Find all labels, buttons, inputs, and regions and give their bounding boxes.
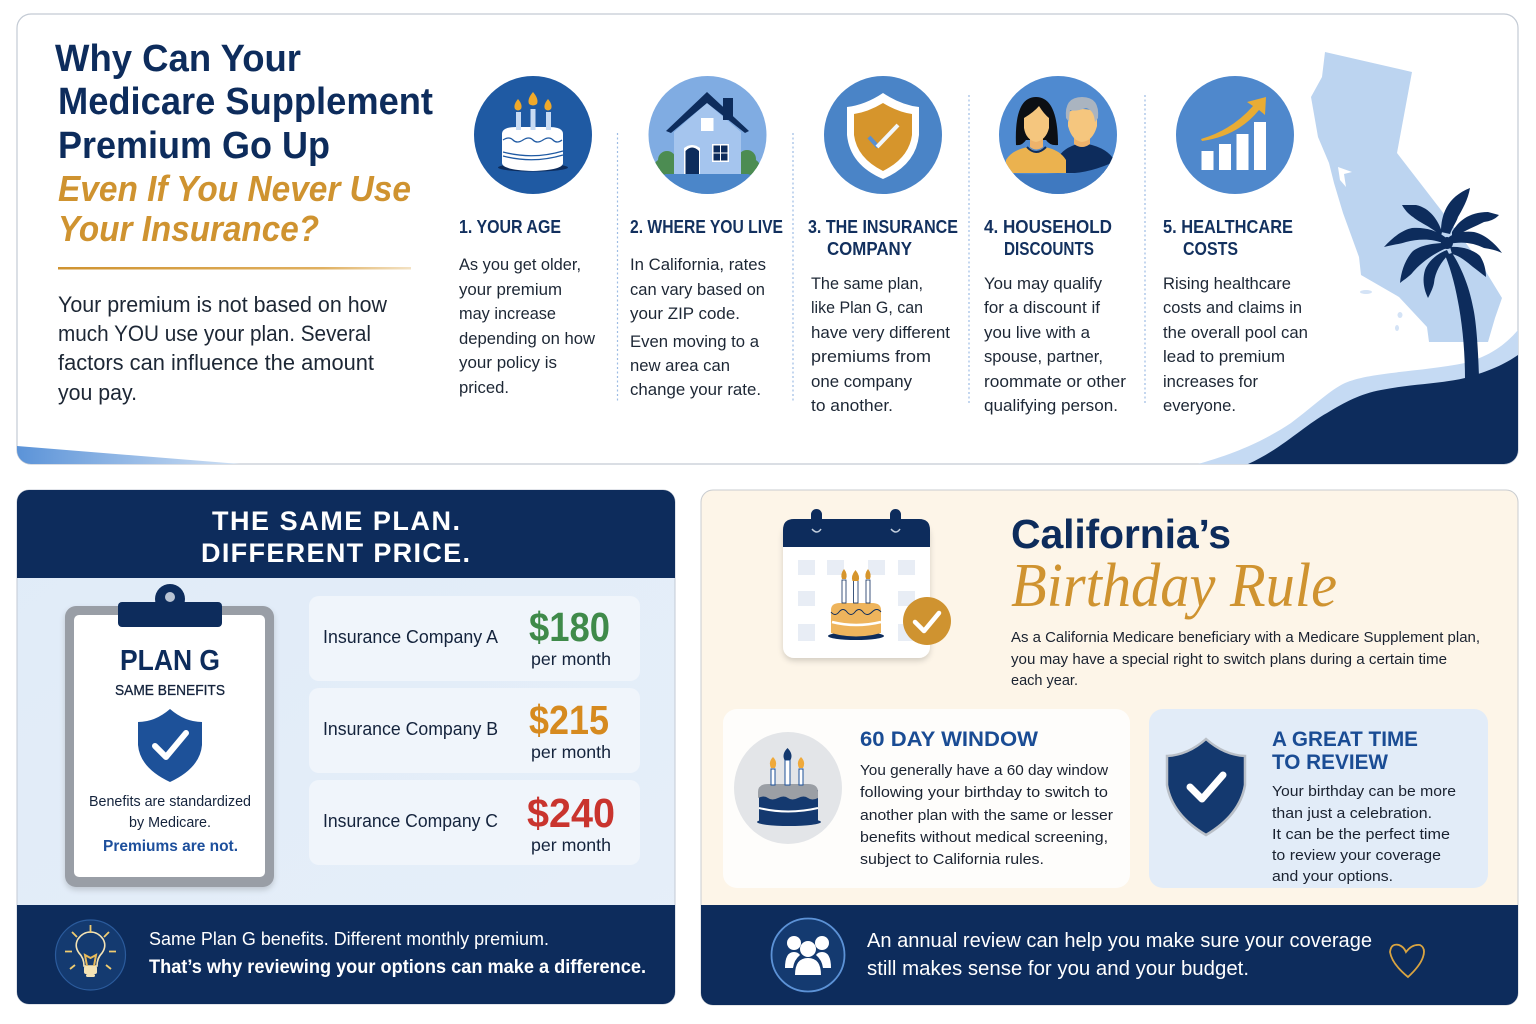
icon: house — [648, 76, 768, 199]
heading: same plan — [201, 506, 470, 568]
icon: birthday cake — [474, 76, 592, 194]
text: the insurance company: have very different — [811, 324, 950, 342]
text: healthcare costs: the overall pool can — [1163, 324, 1308, 342]
clipboard: plan G — [65, 584, 274, 887]
intro text: you may have a special right to switch plans during a certain time — [1011, 651, 1447, 668]
icon: navy cake — [734, 732, 842, 844]
plan name: PLAN G — [120, 645, 220, 677]
text: the insurance company: The same plan, — [811, 275, 923, 293]
intro paragraph: Your premium is not based on how — [58, 292, 387, 317]
callout: annual review: still makes sense for you and your budget. — [867, 958, 1249, 980]
heading: same plan: THE SAME PLAN. — [212, 506, 460, 536]
heading — [1272, 728, 1418, 774]
text: your age: depending on how — [459, 330, 595, 348]
text: where you live: your ZIP code. — [630, 305, 740, 323]
text: healthcare costs: Rising healthcare — [1163, 275, 1291, 293]
title: Medicare Supplement — [58, 81, 433, 123]
heading: the insurance company: 3. THE INSURANCE — [808, 217, 958, 237]
price card: company C — [309, 780, 640, 865]
title: Why Can Your — [55, 38, 301, 80]
title: Even If You Never Use — [58, 168, 411, 209]
price card: company A: per month — [531, 649, 611, 669]
intro text — [1011, 629, 1480, 689]
text: your age: may increase — [459, 305, 556, 323]
text: healthcare costs: increases for — [1163, 373, 1258, 391]
heading: the insurance company — [808, 217, 958, 259]
text: the insurance company — [811, 275, 950, 415]
text: where you live — [630, 256, 766, 399]
panel: why premiums go up — [17, 14, 1518, 464]
body: subject to California rules. — [860, 851, 1044, 868]
callout: annual review — [867, 930, 1372, 980]
text: your age — [459, 256, 595, 397]
heading: healthcare costs: 5. HEALTHCARE — [1163, 217, 1293, 237]
text: where you live: In California, rates — [630, 256, 766, 274]
icon: shield check — [138, 709, 202, 782]
price card: company B: $215 — [529, 697, 609, 743]
price card: company A: Insurance Company A — [323, 627, 498, 647]
icon: shield — [824, 76, 942, 194]
note: by Medicare. — [129, 814, 211, 831]
price card: company A — [309, 596, 640, 681]
heading: A GREAT TIME — [1272, 728, 1418, 751]
hill: navy — [1248, 355, 1518, 464]
panel: California birthday rule — [701, 490, 1518, 1005]
hill: light wave — [1198, 330, 1518, 464]
callout: annual review: An annual review can help you make sure your coverage — [867, 930, 1372, 952]
body: Your birthday can be more — [1272, 783, 1456, 800]
heading: household discounts: 4. HOUSEHOLD — [984, 217, 1112, 237]
body: It can be the perfect time — [1272, 826, 1450, 843]
body: and your options. — [1272, 868, 1393, 885]
intro text: As a California Medicare beneficiary with a Medicare Supplement plan, — [1011, 629, 1480, 646]
price card: company B: per month — [531, 742, 611, 762]
body — [1272, 783, 1456, 885]
text: the insurance company: premiums from — [811, 348, 931, 366]
text: your age: As you get older, — [459, 256, 581, 274]
heading: where you live: 2. WHERE YOU LIVE — [630, 217, 783, 237]
icon: lightbulb — [56, 920, 126, 990]
text: household discounts: roommate or other — [984, 373, 1127, 391]
icon: heart — [1390, 945, 1424, 977]
text: household discounts: You may qualify — [984, 275, 1103, 293]
title: Premium Go Up — [58, 125, 330, 167]
body: to review your coverage — [1272, 847, 1441, 864]
text: where you live: change your rate. — [630, 381, 761, 399]
body: benefits without medical screening, — [860, 829, 1108, 846]
text: the insurance company: to another. — [811, 397, 893, 415]
heading: California's: California’s — [1011, 511, 1231, 557]
price card: company C: Insurance Company C — [323, 811, 498, 831]
title: Your Insurance? — [58, 208, 319, 249]
price card: company C: per month — [531, 835, 611, 855]
intro paragraph: factors can influence the amount — [58, 350, 374, 375]
text: healthcare costs: lead to premium — [1163, 348, 1285, 366]
map: California — [1311, 52, 1502, 342]
heading: 60 DAY WINDOW — [860, 728, 1038, 751]
card: 60 day window — [723, 709, 1130, 888]
body: You generally have a 60 day window — [860, 762, 1108, 779]
subheading: SAME BENEFITS — [115, 682, 225, 699]
text: household discounts: spouse, partner, — [984, 348, 1103, 366]
text: the insurance company: like Plan G, can — [811, 299, 923, 317]
text: where you live: Even moving to a — [630, 333, 760, 351]
text: healthcare costs: everyone. — [1163, 397, 1236, 415]
heading: TO REVIEW — [1272, 751, 1388, 774]
panel: same plan different price — [17, 490, 675, 1005]
price card: company A: $180 — [529, 604, 610, 650]
price card: company B: Insurance Company B — [323, 719, 498, 739]
callout: same plan: Same Plan G benefits. Different monthly premium. — [149, 929, 549, 949]
callout: same plan: That’s why reviewing your options can make a difference. — [149, 957, 646, 978]
icon: family group — [772, 918, 844, 992]
price card: company C: $240 — [527, 790, 615, 836]
text: your age: your policy is — [459, 354, 557, 372]
text: household discounts: qualifying person. — [984, 397, 1118, 415]
text: healthcare costs: costs and claims in — [1163, 299, 1302, 317]
intro paragraph: much YOU use your plan. Several — [58, 321, 371, 346]
text: household discounts — [984, 275, 1127, 415]
callout: same plan — [149, 929, 646, 978]
text: healthcare costs — [1163, 275, 1308, 415]
text: where you live: new area can — [630, 357, 730, 375]
heading: the insurance company: COMPANY — [827, 239, 912, 259]
icon: calendar — [783, 509, 951, 658]
body: another plan with the same or lesser — [860, 807, 1113, 824]
icon: couple — [998, 76, 1118, 199]
icon: shield check — [1167, 739, 1245, 835]
heading: healthcare costs: COSTS — [1183, 239, 1238, 259]
text: the insurance company: one company — [811, 373, 913, 391]
text: where you live: can vary based on — [630, 281, 765, 299]
text: household discounts: for a discount if — [984, 299, 1100, 317]
text: your age: your premium — [459, 281, 562, 299]
note: Premiums are not. — [103, 838, 238, 855]
heading: household discounts — [984, 217, 1112, 259]
card: great time to review — [1149, 709, 1488, 888]
text: household discounts: you live with a — [984, 324, 1091, 342]
title — [55, 38, 433, 249]
icon: palm tree — [1384, 188, 1502, 379]
body: than just a celebration. — [1272, 805, 1432, 822]
heading: household discounts: DISCOUNTS — [1004, 239, 1094, 259]
heading: same plan: DIFFERENT PRICE. — [201, 538, 470, 568]
price card: company B — [309, 688, 640, 773]
note — [89, 793, 251, 855]
note: Benefits are standardized — [89, 793, 251, 810]
intro paragraph: you pay. — [58, 380, 137, 405]
heading: Birthday Rule: Birthday Rule — [1011, 552, 1337, 620]
intro paragraph — [58, 292, 387, 405]
heading: your age: 1. YOUR AGE — [459, 217, 561, 237]
heading: healthcare costs — [1163, 217, 1293, 259]
text: your age: priced. — [459, 379, 509, 397]
intro text: each year. — [1011, 672, 1078, 689]
icon: rising costs chart — [1176, 76, 1294, 194]
body: following your birthday to switch to — [860, 784, 1108, 801]
body — [860, 762, 1113, 868]
